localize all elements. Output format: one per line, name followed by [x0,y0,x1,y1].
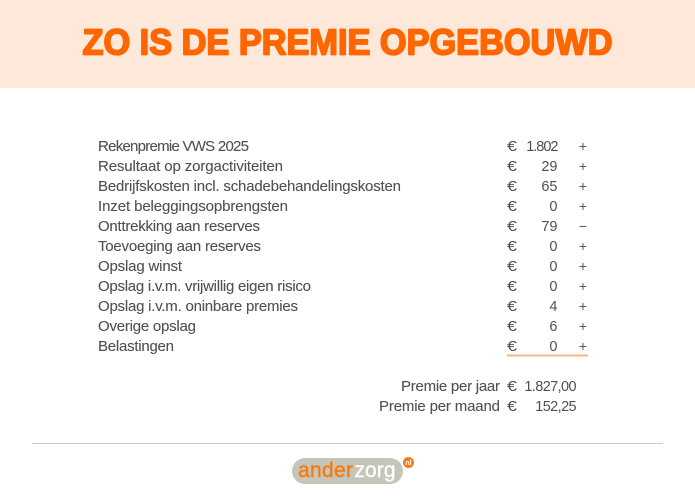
premium breakdown labels: Overige opslag [98,318,196,335]
amounts column: 29 [541,159,558,175]
euro signs column: € [507,298,518,315]
premium breakdown labels: Rekenpremie VWS 2025 [98,138,249,155]
plus and minus signs column: + [579,338,587,354]
euro signs column: € [507,318,518,335]
totals: 1.827,00 [524,379,577,395]
logo: anderzorg [292,457,414,484]
plus and minus signs column: + [579,238,587,254]
header band [0,0,695,88]
amounts column: 65 [541,179,558,195]
premium breakdown labels: Bedrijfskosten incl. schadebehandelingskosten [98,178,401,195]
amounts column: 79 [541,219,558,235]
premium breakdown labels: Opslag i.v.m. oninbare premies [98,298,298,315]
plus and minus signs column: + [579,198,587,214]
totals: € [507,378,518,395]
title: ZO IS DE PREMIE OPGEBOUWD [82,22,612,62]
amounts column: 1.802 [526,139,558,155]
euro signs column: € [507,238,518,255]
logo: anderzorg: zorg [354,459,396,482]
plus and minus signs column: + [579,178,587,194]
amounts column: 0 [549,279,558,295]
amounts column: 0 [549,199,558,215]
amounts column [526,139,558,355]
euro signs column: € [507,198,518,215]
plus and minus signs column: + [579,278,587,294]
plus and minus signs column: + [579,298,587,314]
totals: € [507,398,518,415]
euro signs column: € [507,218,518,235]
premium breakdown labels: Inzet beleggingsopbrengsten [98,198,288,215]
premium breakdown labels: Toevoeging aan reserves [98,238,261,255]
totals: Premie per maand [379,398,500,415]
plus and minus signs column: + [579,318,587,334]
totals [379,378,577,415]
footer divider [32,443,663,444]
euro signs column: € [507,158,518,175]
premium breakdown labels: Onttrekking aan reserves [98,218,260,235]
totals: 152,25 [535,399,577,415]
plus and minus signs column: + [579,258,587,274]
premium breakdown labels: Opslag winst [98,258,183,275]
amounts column: 0 [549,259,558,275]
amounts column: 6 [549,319,558,335]
totals: Premie per jaar [401,378,500,395]
premium breakdown labels [98,138,401,355]
plus and minus signs column: + [579,138,587,154]
amounts column: 4 [549,299,558,315]
plus and minus signs column [579,138,587,354]
plus and minus signs column: + [579,158,587,174]
logo: anderzorg: ander [298,459,353,482]
euro signs column [507,138,518,355]
euro signs column: € [507,278,518,295]
euro signs column: € [507,138,518,155]
premium breakdown labels: Opslag i.v.m. vrijwillig eigen risico [98,278,311,295]
premium breakdown labels: Resultaat op zorgactiviteiten [98,158,283,175]
sum line [507,354,588,356]
euro signs column: € [507,178,518,195]
euro signs column: € [507,258,518,275]
amounts column: 0 [549,239,558,255]
amounts column: 0 [549,339,558,355]
plus and minus signs column: − [579,218,587,234]
euro signs column: € [507,338,518,355]
logo: anderzorg: nl [405,460,412,467]
premium breakdown labels: Belastingen [98,338,174,355]
